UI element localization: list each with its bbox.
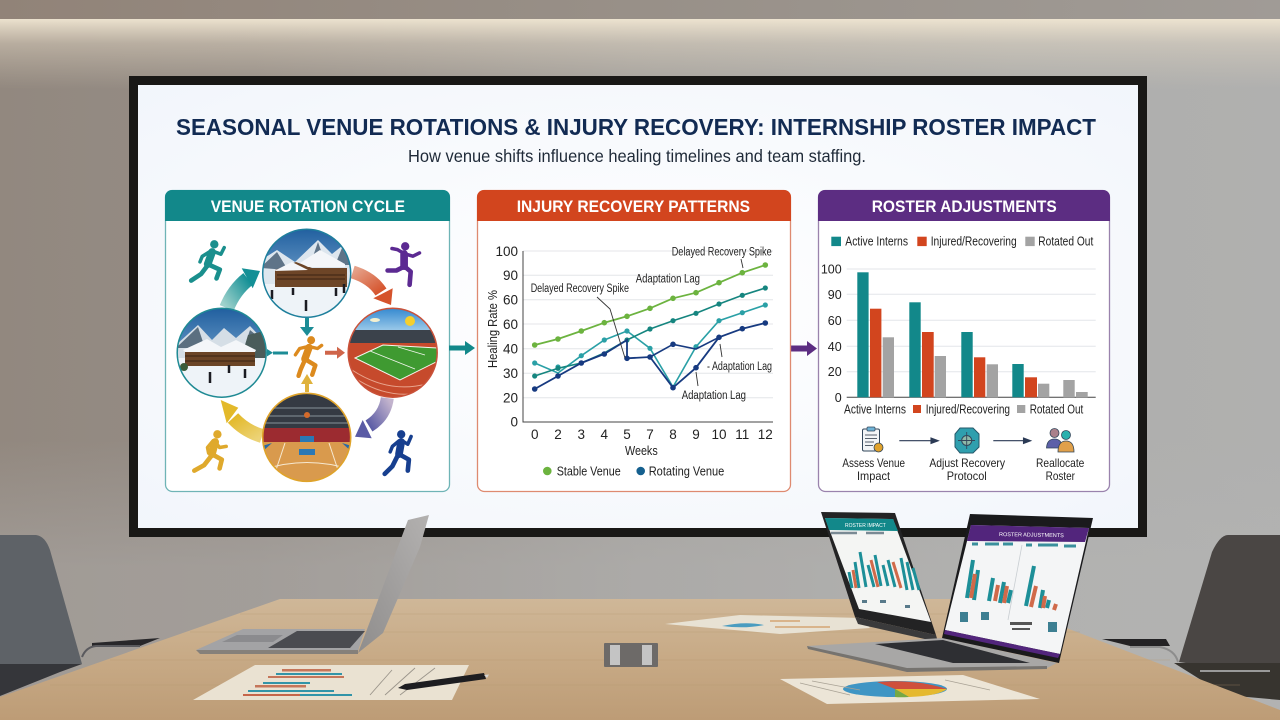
x axis labels: 10 — [711, 427, 727, 442]
y axis labels: 30 — [503, 366, 518, 381]
runner: center orange — [295, 336, 322, 376]
wall screen — [129, 76, 1147, 537]
left chair — [0, 535, 160, 696]
x axis labels: 12 — [758, 427, 773, 442]
chart legend — [543, 464, 724, 478]
y axis labels: 90 — [503, 268, 518, 283]
bar y axis labels: 20 — [828, 365, 842, 379]
step label: assess — [842, 456, 905, 483]
icon: clipboard — [862, 427, 883, 452]
x axis labels: 0 — [531, 427, 538, 442]
small arrow: left to runner — [267, 349, 288, 356]
panel header: venue — [165, 190, 450, 221]
venue image: winter lodge top — [262, 228, 352, 318]
x axis labels: 5 — [623, 427, 631, 442]
lower legend: Active Interns — [844, 402, 906, 416]
bars: injured — [870, 309, 1037, 397]
title: SEASONAL VENUE ROTATIONS & INJURY RECOVERY: INTERNSHIP ROSTER IMPACT — [176, 114, 1097, 140]
small arrow: down to runner — [300, 318, 314, 336]
cycle arrow: teal — [227, 268, 260, 308]
step label: adjust — [929, 456, 1005, 483]
laptop back with teal dashboard — [821, 512, 938, 642]
cycle arrow: yellow — [221, 400, 262, 436]
annotation: adaptation lag top: Adaptation Lag — [636, 274, 700, 286]
step label: reallocate: Roster — [1046, 469, 1075, 483]
icon: recovery protocol — [955, 428, 979, 453]
pie chart — [843, 681, 947, 697]
x axis title: Weeks — [625, 443, 658, 458]
top legend: Active Interns — [845, 234, 908, 248]
bar y axis labels: 100 — [821, 262, 842, 276]
panel header: roster: ROSTER ADJUSTMENTS — [872, 197, 1057, 216]
paper: back report — [665, 615, 870, 634]
panel: injury recovery patterns — [477, 190, 791, 492]
x axis labels: 9 — [692, 427, 700, 442]
top legend — [831, 234, 1094, 248]
step label: assess: Assess Venue — [842, 456, 905, 470]
x axis labels: 7 — [646, 427, 654, 442]
cycle arrow: purple — [355, 398, 387, 438]
bar chart: roster counts — [821, 262, 1096, 405]
y axis labels: 40 — [503, 342, 518, 356]
annotation: adaptation lag right: - Adaptation Lag — [707, 361, 772, 373]
annotation: delayed recovery spike left: Delayed Recovery Spike — [531, 283, 629, 295]
y axis labels: 0 — [510, 414, 518, 430]
y axis labels — [495, 244, 518, 430]
runner: gold — [194, 430, 226, 471]
step label: adjust: Adjust Recovery — [929, 456, 1005, 470]
connector arrow: teal — [449, 341, 475, 355]
top legend: Injured/Recovering — [931, 234, 1017, 248]
screen surface — [138, 85, 1138, 528]
connector arrow: purple — [791, 341, 817, 356]
venue image: indoor arena — [262, 393, 352, 482]
venue image: stadium — [347, 307, 439, 399]
panel header: injury — [477, 190, 791, 221]
paper: pie report — [780, 675, 1040, 704]
icon: team people — [1046, 428, 1074, 452]
open laptop left — [196, 515, 429, 654]
panel header: injury: INJURY RECOVERY PATTERNS — [517, 197, 750, 216]
front laptop title: ROSTER ADJUSTMENTS — [999, 532, 1064, 539]
process arrow 1 — [899, 438, 938, 443]
lower legend — [844, 402, 1084, 416]
panel header: roster — [818, 190, 1110, 221]
process arrow 2 — [993, 438, 1031, 443]
bar y axis labels: 60 — [828, 314, 842, 328]
bar y axis labels: 0 — [835, 391, 842, 405]
x axis labels — [531, 427, 773, 442]
series: light teal — [532, 302, 768, 387]
bar y axis labels — [821, 262, 842, 405]
runner: teal — [191, 240, 224, 281]
series: dark teal — [532, 285, 768, 379]
x axis labels: 11 — [735, 427, 749, 442]
bar y axis labels: 40 — [828, 340, 842, 354]
small arrow: up to runner — [301, 374, 313, 392]
annotation: delayed recovery spike top: Delayed Recovery Spike — [672, 246, 772, 258]
panel header: venue: VENUE ROTATION CYCLE — [211, 197, 405, 216]
y axis labels: 60 — [503, 292, 518, 308]
cycle arrow: orange — [353, 272, 393, 305]
x axis labels: 8 — [669, 427, 677, 442]
annotation: adaptation lag bottom: Adaptation Lag — [682, 390, 746, 402]
panel: venue rotation cycle — [165, 190, 450, 492]
bars: active interns — [857, 272, 1024, 397]
right chair — [1102, 535, 1280, 700]
laptop front with purple dashboard — [807, 514, 1093, 672]
small arrow: right from runner — [325, 347, 345, 359]
paper: bar report — [193, 665, 469, 700]
runner: purple — [388, 242, 420, 285]
venue image: winter lodge left — [176, 308, 268, 400]
step label: assess: Impact — [857, 469, 891, 483]
y axis labels: 100 — [495, 244, 518, 259]
x axis labels: 4 — [601, 427, 609, 442]
runner: blue — [385, 430, 411, 474]
series: stable venue — [532, 262, 768, 348]
y axis labels: 60 — [503, 317, 518, 332]
step label: reallocate: Reallocate — [1036, 456, 1085, 470]
step label: reallocate — [1036, 456, 1085, 483]
lower legend: Rotated Out — [1030, 402, 1084, 416]
y axis title: Healing Rate % — [485, 290, 500, 368]
subtitle: How venue shifts influence healing timelines and team staffing. — [408, 146, 866, 166]
back laptop title: ROSTER IMPACT — [845, 523, 886, 529]
annotation leaders — [597, 259, 743, 386]
line chart: healing rate — [485, 244, 773, 458]
chart legend: Stable Venue — [557, 464, 621, 478]
panel: roster adjustments — [818, 190, 1110, 492]
top legend: Rotated Out — [1038, 234, 1094, 248]
conference table — [0, 599, 1280, 720]
bars: rotated out — [883, 337, 1088, 397]
pen — [398, 673, 489, 690]
screen frame — [129, 76, 1147, 537]
x axis labels: 3 — [578, 427, 585, 442]
chart legend: Rotating Venue — [649, 464, 724, 478]
y axis labels: 20 — [503, 390, 518, 406]
lower legend: Injured/Recovering — [926, 402, 1010, 416]
x axis labels: 2 — [554, 427, 562, 442]
series: rotating venue — [532, 320, 768, 392]
bar y axis labels: 90 — [828, 288, 842, 302]
step label: adjust: Protocol — [947, 469, 987, 483]
